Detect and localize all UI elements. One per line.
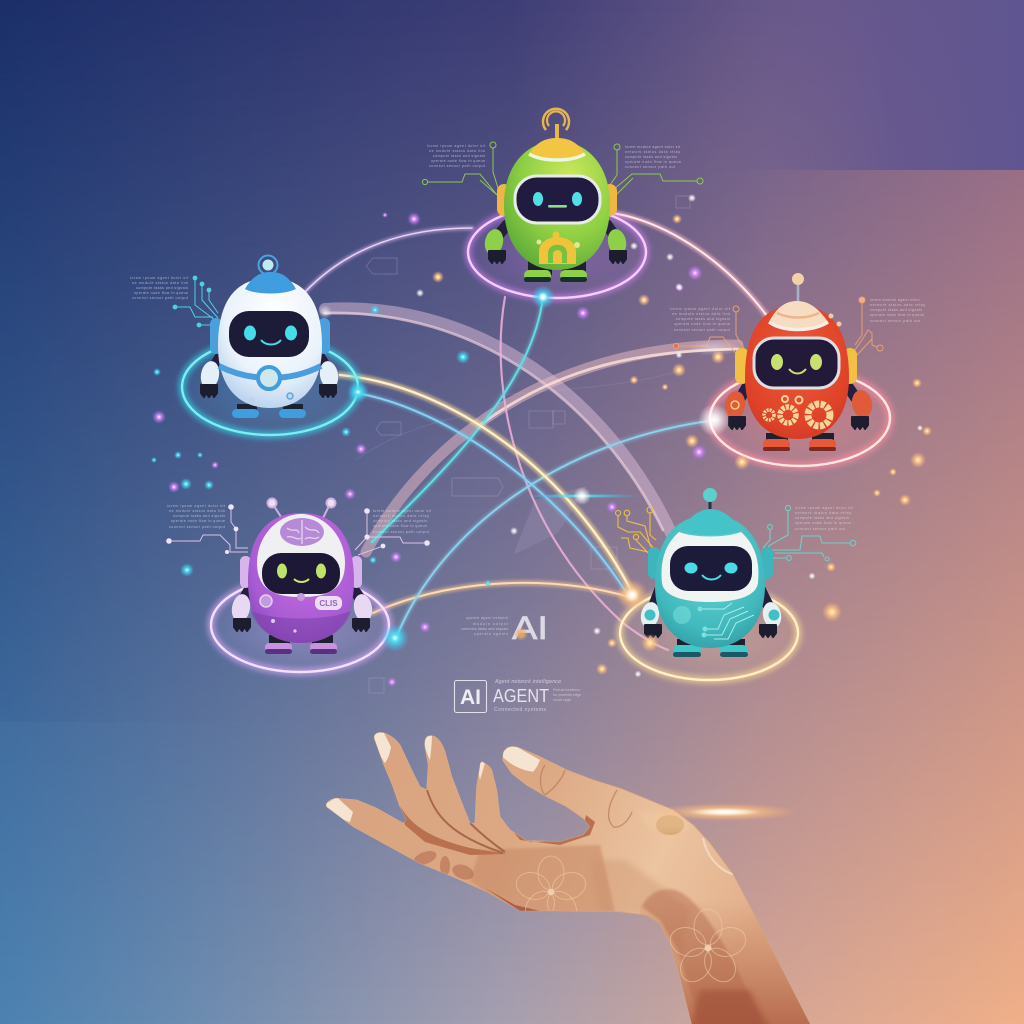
robot figure xyxy=(723,301,874,451)
notes: connect sensor path out xyxy=(625,165,675,169)
notes: connect sensor path output xyxy=(429,164,485,168)
circuit lines xyxy=(166,504,430,555)
ring xyxy=(182,339,358,435)
lens flare xyxy=(653,803,797,821)
notes: compute tasks and signals xyxy=(173,514,225,518)
faint interface outlines xyxy=(355,196,690,693)
notes xyxy=(795,506,853,531)
hand shading and pattern xyxy=(324,731,830,1024)
antenna xyxy=(258,256,278,284)
notes xyxy=(167,504,431,534)
notes xyxy=(130,276,188,300)
notes: compute tasks and signals xyxy=(676,317,730,321)
circuit lines xyxy=(762,505,856,561)
notes: compute tasks and signals xyxy=(870,308,922,312)
notes: compute tasks and signals xyxy=(795,516,849,520)
notes: connect sensor path output xyxy=(169,525,225,529)
notes: connect sensor path out xyxy=(870,319,920,323)
notes: connect sensor path output xyxy=(132,296,188,300)
central AI label xyxy=(461,610,548,646)
logo words: Connected systems xyxy=(494,707,546,713)
wide band: blue to teal xyxy=(325,308,672,535)
robot figure xyxy=(199,272,340,418)
notes: ne module status data link xyxy=(429,149,485,153)
connection arcs xyxy=(305,213,770,650)
notes xyxy=(670,298,925,332)
antenna xyxy=(792,273,804,308)
yellow circuit lines xyxy=(616,507,656,558)
notes: operate node flow in queue xyxy=(431,159,485,163)
notes: network status data relay xyxy=(625,150,680,154)
ring xyxy=(468,206,646,298)
notes: lorem module agent dolor sit xyxy=(373,509,431,513)
ring xyxy=(710,370,890,466)
flower pattern xyxy=(513,856,749,988)
notes: lorem module agent dolor sit xyxy=(625,145,680,149)
notes: operate node flow in queue xyxy=(795,521,851,525)
notes: ne module status data link xyxy=(169,509,225,513)
robot figure xyxy=(230,513,374,654)
peach arc: purple to teal xyxy=(373,583,630,613)
notes: operate node flow in queue xyxy=(625,160,681,164)
robot: blue xyxy=(130,256,358,435)
notes: network status data relay xyxy=(373,514,429,518)
AI mark: AI xyxy=(512,610,548,646)
note: operate agents xyxy=(474,632,508,636)
arc: green to red xyxy=(612,213,770,320)
notes: compute tasks and signals xyxy=(136,286,188,290)
circuit lines xyxy=(673,297,883,356)
notes: compute tasks and signals xyxy=(625,155,677,159)
notes: network status data relay xyxy=(795,511,851,515)
logo words: cloud edge xyxy=(553,698,571,702)
notes: operate node flow in queue xyxy=(870,313,924,317)
logo words: Agent network intelligence xyxy=(494,679,561,685)
notes: lorem ipsum agent dolor sit xyxy=(795,506,853,510)
ring xyxy=(620,586,798,680)
logo words: AGENT xyxy=(493,685,549,706)
circuit lines xyxy=(173,276,218,327)
note: connects tasks and signals xyxy=(461,627,508,631)
robot figure xyxy=(482,138,629,282)
antennae xyxy=(268,498,336,520)
bright connection nodes xyxy=(318,285,740,611)
yellow arc: blue to teal xyxy=(340,375,634,596)
logo box: AI xyxy=(460,686,481,709)
robot: green xyxy=(422,109,703,298)
notes: connect sensor path out xyxy=(795,527,845,531)
note: system agent network xyxy=(466,616,508,620)
ring xyxy=(211,578,389,672)
robot: teal xyxy=(616,488,856,680)
notes: network status data relay xyxy=(870,303,925,307)
robot figure xyxy=(638,509,784,657)
notes: lorem module agent dolor xyxy=(870,298,921,302)
arc: blue to green xyxy=(305,228,472,292)
blue arc: blue to teal xyxy=(357,393,626,592)
notes: lorem ipsum agent dolor sit xyxy=(130,276,188,280)
blue arc: purple to red xyxy=(396,420,716,638)
circuit lines xyxy=(422,142,703,195)
pink arc: green to teal xyxy=(501,297,668,650)
wide band: purple to red xyxy=(366,345,738,552)
antenna xyxy=(543,109,569,147)
notes: lorem ipsum agent dolor sit xyxy=(167,504,225,508)
hand silhouette xyxy=(326,733,810,1024)
notes: lorem ipsum agent dolor sit xyxy=(670,307,730,311)
AI AGENT logo xyxy=(454,679,581,713)
robot: purple xyxy=(166,498,431,672)
robot figure: CLIS xyxy=(319,599,338,608)
notes: compute tasks and signals xyxy=(373,519,427,523)
logo words: Robust functions xyxy=(553,688,580,692)
note xyxy=(461,616,508,636)
teal arc: green to purple xyxy=(372,297,543,542)
notes: ne module status data link xyxy=(672,312,730,316)
logo words: for powerful edge xyxy=(553,693,581,697)
note: module output xyxy=(473,622,508,626)
notes xyxy=(427,144,681,169)
notes: operate node flow in queue xyxy=(171,519,225,523)
notes: lorem ipsum agent dolor sit xyxy=(427,144,485,148)
notes: operate node flow in queue xyxy=(373,524,427,528)
logo words xyxy=(493,679,581,713)
robot: red xyxy=(670,273,925,466)
hand xyxy=(324,731,830,1024)
fingernails xyxy=(324,731,540,822)
notes: operate node flow in queue xyxy=(674,322,730,326)
notes: compute tasks and signals xyxy=(433,154,485,158)
antenna xyxy=(703,488,717,517)
notes: connect sensor path output xyxy=(373,530,429,534)
notes: operate node flow in queue xyxy=(134,291,188,295)
particles xyxy=(151,194,932,687)
notes: connect sensor path output xyxy=(674,328,730,332)
notes: ne module status data link xyxy=(132,281,188,285)
